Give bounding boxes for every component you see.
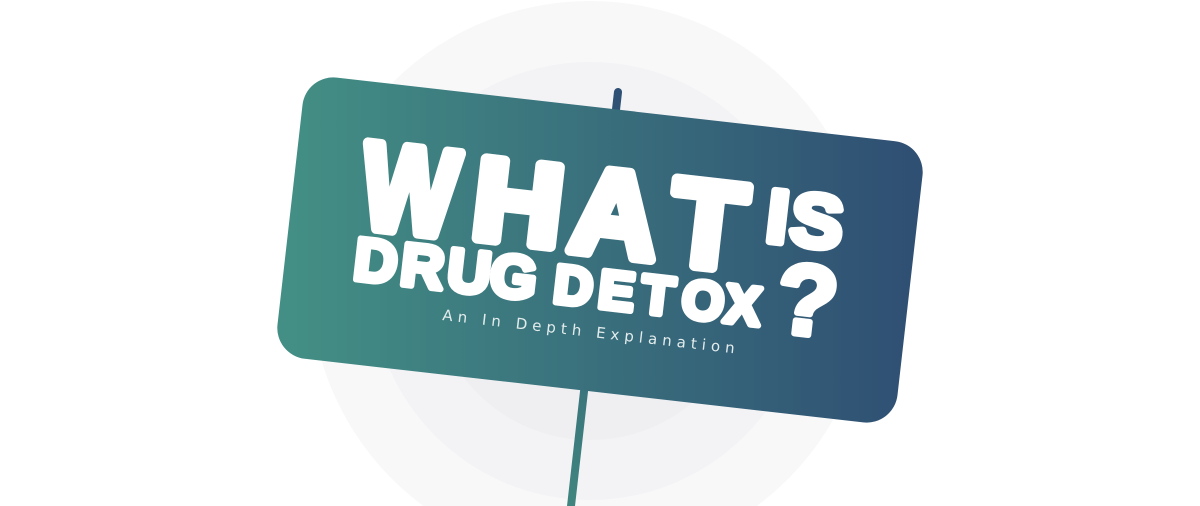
title: WHAT: W	[355, 117, 465, 263]
sign pole	[567, 88, 622, 506]
title: DRUG: DRUG	[351, 225, 541, 313]
sign board	[274, 74, 926, 426]
title: question mark: ?	[771, 242, 844, 360]
title: WHAT: A	[564, 141, 666, 286]
title: WHAT: H	[466, 134, 570, 272]
title: DETOX: DETOX	[551, 254, 764, 337]
title: WHAT: T	[663, 153, 753, 296]
title: WHAT	[355, 117, 753, 296]
subtitle: An In Depth Explanation	[442, 306, 736, 357]
background concentric circles	[310, 1, 870, 506]
title: IS: IS	[762, 174, 848, 266]
